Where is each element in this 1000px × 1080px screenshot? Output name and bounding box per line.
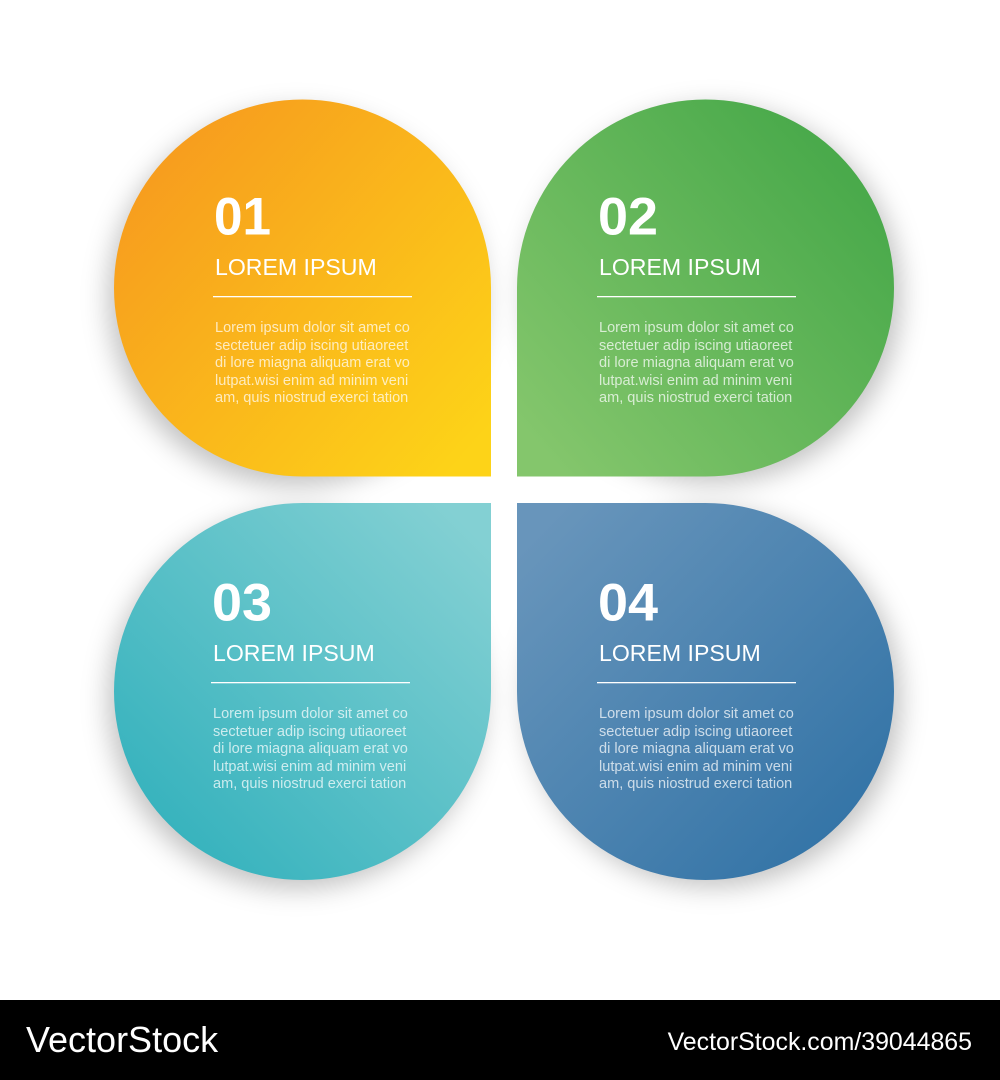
body text 01: di lore miagna aliquam erat vo [215, 355, 410, 371]
body text 02: di lore miagna aliquam erat vo [599, 355, 794, 371]
body text 02: am, quis niostrud exerci tation [599, 390, 792, 406]
body text 04: am, quis niostrud exerci tation [599, 776, 792, 792]
body text 04: Lorem ipsum dolor sit amet co [599, 706, 794, 722]
body text 02: lutpat.wisi enim ad minim veni [599, 373, 792, 389]
number 01: 01 [214, 188, 271, 246]
body text 03: sectetuer adip iscing utiaoreet [213, 724, 406, 740]
divider 04 [597, 682, 796, 683]
footer url: VectorStock.com/39044865 [668, 1028, 972, 1056]
footer bar [0, 1000, 1000, 1080]
body text 02: Lorem ipsum dolor sit amet co [599, 320, 794, 336]
petal 01 [114, 99, 491, 477]
panel 04 [517, 503, 894, 880]
panel 01 [114, 99, 491, 477]
body text 01: lutpat.wisi enim ad minim veni [215, 373, 408, 389]
divider 01 [213, 296, 412, 297]
divider 02 [597, 296, 796, 297]
heading 02: LOREM IPSUM [599, 254, 761, 280]
body text 04: di lore miagna aliquam erat vo [599, 741, 794, 757]
body text 01: am, quis niostrud exerci tation [215, 390, 408, 406]
number 04: 04 [598, 574, 659, 632]
number 02: 02 [598, 188, 658, 246]
body text 03: Lorem ipsum dolor sit amet co [213, 706, 408, 722]
divider 03 [211, 682, 410, 683]
body text 03: am, quis niostrud exerci tation [213, 776, 406, 792]
shadows [108, 107, 901, 889]
body text 01: sectetuer adip iscing utiaoreet [215, 338, 408, 354]
body text 04: lutpat.wisi enim ad minim veni [599, 759, 792, 775]
number 03: 03 [212, 574, 272, 632]
body text 04: sectetuer adip iscing utiaoreet [599, 724, 792, 740]
body text 01: Lorem ipsum dolor sit amet co [215, 320, 410, 336]
petal 03 [114, 503, 491, 880]
petal 02 [517, 99, 894, 477]
body text 02: sectetuer adip iscing utiaoreet [599, 338, 792, 354]
body text 03: di lore miagna aliquam erat vo [213, 741, 408, 757]
body text 03: lutpat.wisi enim ad minim veni [213, 759, 406, 775]
panel 02 [517, 99, 894, 477]
heading 03: LOREM IPSUM [213, 640, 375, 666]
panel 03 [114, 503, 491, 880]
petal 04 [517, 503, 894, 880]
footer logo: VectorStock [26, 1019, 219, 1060]
heading 04: LOREM IPSUM [599, 640, 761, 666]
heading 01: LOREM IPSUM [215, 254, 377, 280]
